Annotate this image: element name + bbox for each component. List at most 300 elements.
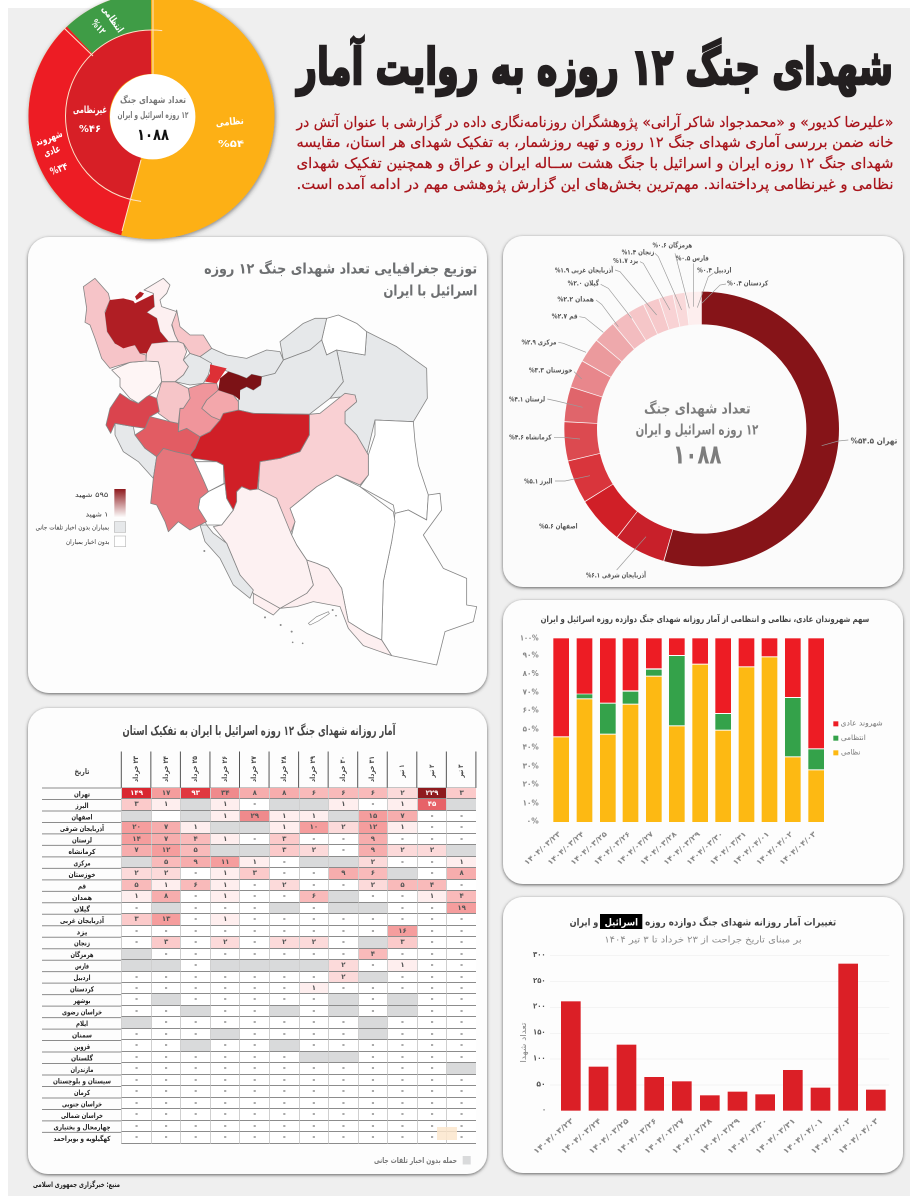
top donut segment labels: غیرنظامی: [73, 105, 107, 116]
donut labels: لرستان ۴.۱%: [509, 395, 545, 403]
daily province data table: -: [253, 1041, 256, 1049]
daily province data table: ۹: [341, 869, 346, 877]
donut labels: البرز ۵.۱%: [524, 477, 552, 485]
intro text: «علیرضا کدیور» و «محمدجواد شاکر آرانی» پژوهشگران روزنامه‌نگاری داده در گزارشی با عنوان آتش در: [296, 113, 894, 131]
daily province data table: -: [460, 881, 463, 889]
daily province data table: -: [431, 1018, 433, 1026]
intro text: [296, 113, 894, 193]
daily province data table: -: [253, 892, 256, 900]
daily province data table: -: [135, 1030, 138, 1038]
daily province data table: -: [371, 800, 374, 808]
table province names: زنجان: [74, 940, 90, 948]
table province names: فارس: [75, 963, 89, 971]
daily province data table: -: [283, 1133, 286, 1141]
stacked chart date labels: ۱۴۰۴/۰۳/۲۴: [546, 829, 586, 867]
table province names: خراسان جنوبی: [62, 1100, 102, 1108]
daily province data table: -: [135, 1087, 138, 1095]
daily province data table: -: [283, 972, 286, 980]
daily province data table: -: [135, 1099, 138, 1107]
bar chart date labels: ۱۴۰۴/۰۳/۲۸: [670, 1116, 714, 1156]
top donut segment labels: عادی: [42, 144, 62, 160]
daily province data table: -: [342, 984, 345, 992]
daily province data table: ۴: [459, 892, 464, 900]
daily province data table: -: [431, 869, 433, 877]
daily province data table: ۷: [164, 835, 168, 843]
daily province data table: -: [283, 950, 286, 958]
daily province data table: -: [165, 1110, 168, 1118]
daily province data table: ۲: [400, 846, 405, 854]
daily province data table: ۳: [459, 789, 464, 797]
daily province data table: ۵: [164, 858, 168, 866]
table column headers: ۲۷ خرداد: [250, 755, 258, 782]
table column headers: ۲۵ خرداد: [191, 755, 199, 782]
daily province data table: ۱۷: [162, 789, 170, 797]
daily province data table: -: [194, 972, 197, 980]
daily province data table: -: [401, 1110, 404, 1118]
daily province data table: -: [165, 1076, 168, 1084]
bar chart date labels: ۱۴۰۴/۰۳/۲۵: [587, 1116, 631, 1156]
daily province data table: ۲۹: [250, 812, 259, 820]
daily province data table: -: [401, 1053, 404, 1061]
top donut segment labels: انتظامی: [99, 4, 125, 35]
daily province data table: -: [194, 984, 197, 992]
daily province data table: ۱۲: [162, 846, 170, 854]
daily province data table: -: [431, 995, 433, 1003]
daily province data table: ۱: [164, 881, 168, 889]
donut labels: تهران ۵۴.۵%: [851, 436, 897, 445]
daily province data table: ۷: [134, 846, 139, 854]
map legend: ۵۹۵ شهید: [75, 491, 109, 499]
daily province data table: -: [342, 846, 345, 854]
donut labels: هرمزگان ۰.۶%: [652, 240, 692, 249]
donut leader lines: [547, 253, 848, 570]
daily province data table: -: [312, 1018, 315, 1026]
daily province data table: [121, 788, 476, 1144]
bar chart date labels: ۱۴۰۴/۰۴/۰۲: [809, 1116, 853, 1156]
daily province data table: ۲: [371, 881, 375, 889]
daily province data table: -: [194, 904, 197, 912]
daily province data table: -: [312, 1133, 315, 1141]
daily province data table: -: [431, 823, 433, 831]
daily province data table: -: [431, 1064, 433, 1072]
daily province data table: -: [165, 1133, 168, 1141]
table province names: [53, 790, 111, 1143]
table province names: کرمان: [74, 1089, 91, 1097]
daily province data table: -: [460, 1122, 463, 1130]
daily province data table: -: [431, 1030, 433, 1038]
bar chart y axis: ۲۰۰: [533, 1002, 546, 1011]
daily province data table: -: [312, 927, 315, 935]
daily province data table: ۱: [223, 835, 227, 843]
daily province data table: -: [312, 904, 315, 912]
daily province data table: -: [401, 915, 404, 923]
daily province data table: -: [342, 1030, 345, 1038]
daily province data table: -: [342, 835, 345, 843]
daily province data table: -: [283, 1018, 286, 1026]
table province names: گیلان: [74, 904, 91, 913]
daily province data table: -: [165, 1030, 168, 1038]
daily province data table: -: [371, 1053, 374, 1061]
daily province data table: -: [342, 881, 345, 889]
daily province data table: -: [431, 950, 433, 958]
table column headers: ۲۴ خرداد: [162, 755, 170, 782]
daily province data table: ۲: [312, 938, 316, 946]
daily province data table: -: [431, 1122, 433, 1130]
daily province data table: -: [460, 1053, 463, 1061]
daily province data table: -: [283, 1076, 286, 1084]
daily province data table: -: [460, 950, 463, 958]
panel: daily bar chart: [503, 897, 903, 1173]
daily province data table: ۶: [312, 892, 316, 900]
daily province data table: -: [253, 881, 256, 889]
daily province data table: ۲: [341, 972, 346, 980]
daily province data table: -: [342, 1110, 345, 1118]
daily province data table: ۲: [430, 846, 434, 854]
daily province data table: ۳: [253, 869, 257, 877]
top donut segment labels: شهروند: [34, 129, 64, 149]
bar chart date labels: [532, 1116, 880, 1156]
daily province data table: -: [135, 927, 138, 935]
donut labels: گیلان ۲.۰%: [568, 279, 600, 288]
daily province data table: -: [283, 984, 286, 992]
table province names: قزوین: [74, 1043, 90, 1051]
map legend: [35, 489, 126, 547]
bar chart date labels: ۱۴۰۴/۰۴/۰۳: [837, 1116, 880, 1156]
daily province data table: ۹: [371, 835, 375, 843]
top donut center text: ۱۰۸۸: [137, 125, 169, 144]
table province names: ایلام: [76, 1020, 88, 1028]
bar chart y axis: ۰: [542, 1105, 546, 1114]
stacked chart date labels: ۱۴۰۴/۰۳/۲۷: [615, 829, 656, 867]
daily province data table: -: [431, 1041, 433, 1049]
top donut segment labels: %۴۶: [79, 124, 101, 135]
daily province data table: -: [371, 1087, 374, 1095]
daily province data table: -: [312, 881, 315, 889]
daily province data table: -: [253, 1133, 256, 1141]
bar chart title: اسرائیل: [605, 918, 638, 929]
daily province data table: -: [253, 984, 256, 992]
table province names: گلستان: [71, 1054, 94, 1062]
Persian Gulf islands: [203, 550, 337, 644]
daily province data table: ۶: [312, 789, 316, 797]
daily province data table: ۶: [194, 881, 198, 889]
daily province data table: -: [431, 961, 433, 969]
daily province data table: -: [224, 1041, 227, 1049]
stacked bars: [553, 638, 824, 822]
daily bars: [561, 964, 886, 1111]
daily province data table: -: [253, 1018, 256, 1026]
daily province data table: ۱: [223, 915, 227, 923]
daily province data table: -: [135, 995, 138, 1003]
daily province data table: ۱: [194, 823, 198, 831]
daily province data table: ۱: [312, 984, 316, 992]
daily province data table: ۱: [400, 800, 405, 808]
daily province data table: -: [312, 1030, 315, 1038]
y axis labels: [520, 634, 539, 826]
daily province data table: -: [431, 972, 433, 980]
donut center text: [636, 400, 758, 471]
bar chart y axis: ۱۵۰: [533, 1028, 546, 1037]
daily province data table: -: [312, 1110, 315, 1118]
daily province data table: -: [135, 972, 138, 980]
daily province data table: -: [165, 1041, 168, 1049]
daily province data table: ۲: [134, 869, 139, 877]
table province names: کهگیلویه و بویراحمد: [54, 1134, 111, 1143]
daily province data table: -: [283, 927, 286, 935]
map legend: بمباران بدون اخبار تلفات جانی: [35, 524, 109, 532]
daily province data table: -: [135, 1133, 138, 1141]
daily province data table: ۹۳: [191, 789, 200, 797]
table column headers: ۱ تیر: [398, 764, 406, 778]
daily province data table: -: [342, 1064, 345, 1072]
stacked chart date labels: ۱۴۰۴/۰۳/۲۳: [522, 829, 563, 867]
y axis labels: ۷۰%: [523, 687, 539, 696]
daily province data table: -: [194, 995, 197, 1003]
table province names: بوشهر: [73, 997, 91, 1005]
table province names: آذربایجان غربی: [60, 916, 104, 925]
donut labels: فارس ۰.۵%: [676, 255, 709, 263]
daily province data table: -: [253, 835, 256, 843]
stacked chart date labels: ۱۴۰۴/۰۳/۳۰: [685, 829, 725, 867]
daily province data table: -: [312, 1064, 315, 1072]
daily province data table: -: [283, 1087, 286, 1095]
stacked chart date labels: ۱۴۰۴/۰۴/۰۲: [754, 829, 795, 867]
stacked chart date labels: ۱۴۰۴/۰۳/۲۹: [662, 829, 702, 867]
table province names: آذربایجان شرقی: [60, 824, 104, 833]
daily province data table: -: [312, 950, 315, 958]
daily province data table: -: [431, 1099, 433, 1107]
daily province data table: -: [253, 972, 256, 980]
table province names: مازندران: [70, 1066, 94, 1074]
top donut center text: [118, 94, 189, 144]
daily province data table: -: [431, 1087, 433, 1095]
daily province data table: -: [401, 1041, 404, 1049]
daily province data table: ۱۶: [398, 927, 407, 935]
donut center text: تعداد شهدای جنگ: [644, 400, 751, 418]
daily province data table: -: [312, 1076, 315, 1084]
table title: آمار روزانه شهدای جنگ ۱۲ روزه اسرائیل با ایران به تفکیک استان: [122, 722, 396, 739]
daily province data table: -: [371, 1076, 374, 1084]
daily province data table: ۲: [282, 881, 286, 889]
daily province data table: ۲: [312, 846, 316, 854]
bar chart subtitle: بر مبنای تاریخ جراحت از ۲۳ خرداد تا ۳ تیر ۱۴۰۴: [604, 935, 802, 945]
daily province data table: -: [371, 1064, 374, 1072]
top donut center text: ۱۲ روزه اسرائیل و ایران: [118, 111, 189, 121]
daily province data table: ۱: [223, 881, 227, 889]
daily province data table: -: [401, 1099, 404, 1107]
intro text: خانه ضمن بررسی آماری شهدای جنگ ۱۲ روزه و تهیه روزشمار، به تفکیک شهدای هر استان، مقایسه: [296, 133, 894, 151]
table legend: حمله بدون اخبار تلفات جانی: [374, 1156, 457, 1165]
daily province data table: -: [401, 1076, 404, 1084]
daily province data table: -: [194, 961, 197, 969]
daily province data table: -: [312, 835, 315, 843]
bar chart y axis: ۱۰۰: [533, 1053, 546, 1062]
daily province data table: -: [401, 892, 404, 900]
daily province data table: -: [460, 972, 463, 980]
daily province data table: -: [283, 1030, 286, 1038]
stacked chart date labels: ۱۴۰۴/۰۴/۰۳: [778, 829, 818, 867]
daily province data table: -: [283, 995, 286, 1003]
map title: اسرائیل با ایران: [383, 283, 477, 300]
table column headers: تاریخ: [74, 767, 90, 776]
source note: منبع: خبرگزاری جمهوری اسلامی: [33, 1180, 120, 1189]
table province names: قم: [78, 882, 86, 890]
daily province data table: -: [194, 1018, 197, 1026]
daily province data table: -: [431, 1133, 433, 1141]
daily province data table: -: [224, 1064, 227, 1072]
daily province data table: -: [194, 1110, 197, 1118]
daily province data table: -: [460, 961, 463, 969]
daily province data table: ۵: [194, 846, 198, 854]
daily province data table: -: [283, 1053, 286, 1061]
daily province data table: -: [460, 1110, 463, 1118]
daily province data table: -: [312, 1007, 315, 1015]
daily province data table: ۳: [164, 938, 168, 946]
daily province data table: -: [342, 950, 345, 958]
daily province data table: ۱۲: [369, 823, 377, 831]
daily province data table: -: [342, 1087, 345, 1095]
daily province data table: -: [312, 1122, 315, 1130]
daily province data table: -: [224, 1087, 227, 1095]
daily province data table: -: [312, 869, 315, 877]
bar chart title: [570, 914, 836, 929]
bar chart date labels: ۱۴۰۴/۰۳/۳۱: [754, 1116, 797, 1156]
daily province data table: -: [253, 1030, 256, 1038]
table column headers: ۲۳ خرداد: [132, 755, 140, 782]
y axis labels: ۱۰%: [523, 798, 539, 807]
daily province data table: -: [460, 1133, 463, 1141]
bar chart date labels: ۱۴۰۴/۰۳/۲۴: [559, 1116, 603, 1156]
daily province data table: -: [460, 1041, 463, 1049]
daily province data table: ۹: [371, 846, 375, 854]
daily province data table: -: [342, 1133, 345, 1141]
daily province data table: -: [371, 1041, 374, 1049]
donut labels: همدان ۲.۲%: [557, 295, 594, 303]
donut segments: [581, 308, 823, 550]
donut center text: ۱۲ روزه اسرائیل و ایران: [636, 421, 758, 438]
daily province data table: -: [194, 1076, 197, 1084]
daily province data table: -: [371, 961, 374, 969]
stacked chart date labels: ۱۴۰۴/۰۳/۲۵: [569, 829, 609, 867]
daily province data table: -: [460, 984, 463, 992]
donut labels: کرمانشاه ۴.۶%: [509, 434, 552, 442]
daily province data table: ۸: [253, 789, 257, 797]
daily province data table: -: [401, 858, 404, 866]
daily province data table: ۱: [400, 961, 405, 969]
daily province data table: ۱: [430, 892, 434, 900]
daily province data table: -: [431, 904, 433, 912]
donut labels: کردستان ۰.۴%: [727, 280, 769, 288]
panel: stacked bar chart: [503, 600, 903, 884]
daily province data table: -: [460, 1099, 463, 1107]
daily province data table: -: [460, 1087, 463, 1095]
bar chart title: و ایران: [570, 918, 598, 929]
daily province data table: ۵: [400, 881, 405, 889]
daily province data table: -: [283, 1122, 286, 1130]
daily province data table: -: [431, 812, 433, 820]
daily province data table: -: [460, 1030, 463, 1038]
daily province data table: -: [135, 984, 138, 992]
daily province data table: -: [431, 1053, 433, 1061]
daily province data table: -: [371, 984, 374, 992]
daily province data table: ۲: [341, 823, 346, 831]
map title: توزیع جغرافیایی تعداد شهدای جنگ ۱۲ روزه: [204, 260, 477, 278]
daily province data table: -: [312, 995, 315, 1003]
top donut segment labels: [34, 4, 244, 178]
daily province data table: -: [135, 1076, 138, 1084]
daily province data table: ۱۵: [369, 812, 377, 820]
y axis labels: ۵۰%: [523, 724, 539, 733]
bar chart date labels: ۱۴۰۴/۰۴/۰۱: [781, 1116, 825, 1156]
daily province data table: -: [342, 938, 345, 946]
daily province data table: -: [135, 1122, 138, 1130]
daily province data table: -: [342, 1076, 345, 1084]
daily province data table: -: [283, 1064, 286, 1072]
daily province data table: ۲۰: [132, 823, 141, 831]
daily province data table: -: [312, 1099, 315, 1107]
y axis labels: ۰%: [527, 817, 539, 826]
table province names: چهارمحال و بختیاری: [54, 1123, 110, 1131]
table province names: همدان: [72, 894, 92, 902]
daily province data table: ۱: [223, 869, 227, 877]
table column headers: ۳۱ خرداد: [368, 756, 376, 782]
daily province data table: -: [253, 800, 256, 808]
bar chart date labels: ۱۴۰۴/۰۳/۳۰: [726, 1116, 769, 1156]
daily province data table: -: [283, 892, 286, 900]
y axis labels: ۸۰%: [523, 669, 539, 678]
daily province data table: -: [194, 1133, 197, 1141]
donut labels: اردبیل ۰.۴%: [697, 266, 731, 274]
daily province data table: -: [224, 950, 227, 958]
daily province data table: -: [431, 858, 433, 866]
daily province data table: -: [283, 915, 286, 923]
daily province data table: -: [165, 1122, 168, 1130]
daily province data table: -: [342, 915, 345, 923]
stacked chart date labels: ۱۴۰۴/۰۳/۲۸: [638, 829, 679, 867]
table province names: سمنان: [72, 1032, 92, 1040]
bar chart y axis: [519, 950, 546, 1114]
daily province data table: ۱: [223, 800, 227, 808]
table province names: خراسان رضوی: [62, 1009, 102, 1017]
stacked chart legend: انتظامی: [841, 733, 866, 742]
daily province data table: -: [342, 1122, 345, 1130]
table province names: مرکزی: [74, 859, 90, 867]
daily province data table: ۱: [134, 892, 139, 900]
daily province data table: -: [431, 1076, 433, 1084]
daily province data table: -: [224, 1133, 227, 1141]
table province names: سیستان و بلوچستان: [53, 1078, 111, 1086]
daily province data table: ۴: [430, 881, 434, 889]
daily province data table: -: [460, 823, 463, 831]
daily province data table: -: [135, 938, 138, 946]
daily province data table: -: [194, 1053, 197, 1061]
intro text: نظامی و غیرنظامی پرداخته‌اند. مهم‌ترین بخش‌های این گزارش پژوهشی مهم در ادامه آمده است.: [296, 175, 893, 193]
bar chart date labels: ۱۴۰۴/۰۳/۲۳: [532, 1116, 575, 1156]
daily province data table: ۶: [371, 789, 375, 797]
donut center text: ۱۰۸۸: [673, 440, 721, 471]
daily province data table: ۴: [194, 835, 198, 843]
daily province data table: -: [401, 835, 404, 843]
map legend: ۱ شهید: [86, 511, 108, 519]
top donut segment labels: %۳۴: [49, 161, 69, 178]
daily province data table: -: [194, 938, 197, 946]
donut labels: آذربایجان غربی ۱.۹%: [555, 265, 614, 274]
daily province data table: ۹: [194, 858, 198, 866]
daily province data table: -: [401, 1087, 404, 1095]
stacked chart legend: شهروند عادی: [841, 719, 883, 728]
table column headers: ۳ تیر: [457, 764, 465, 778]
table column headers: ۲۹ خرداد: [309, 755, 317, 782]
